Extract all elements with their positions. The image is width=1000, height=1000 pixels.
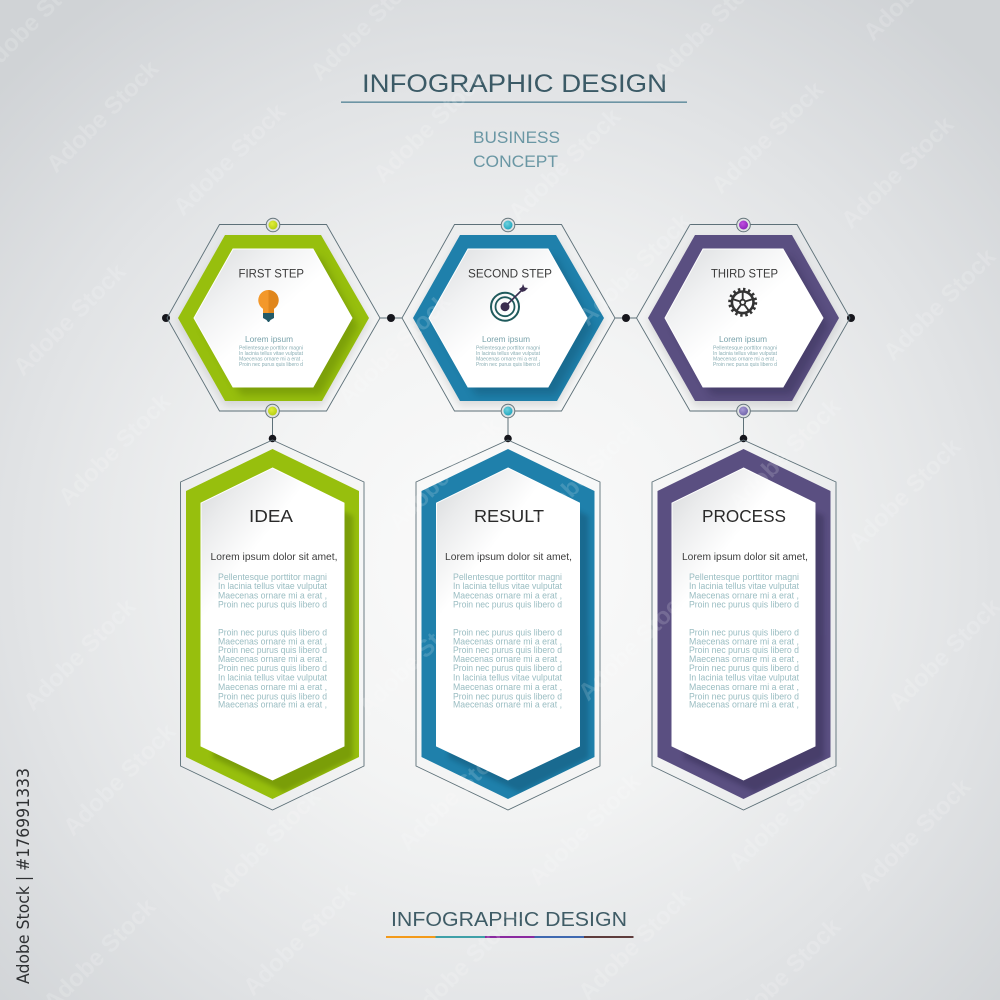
card text block 1: Pellentesque porttitor magni (453, 571, 562, 582)
card text block 2: Maecenas ornare mi a erat , (689, 699, 799, 710)
white hexagon panel (194, 249, 352, 387)
column 3: third step hexagon (636, 218, 850, 442)
card heading: RESULT (474, 506, 544, 526)
infographic canvas: Adobe Stock (723, 753, 847, 876)
subtitle: BUSINESS (473, 129, 560, 147)
card text block 2: Maecenas ornare mi a erat , (218, 699, 327, 710)
card text block 2: Proin nec purus quis libero d (453, 662, 562, 673)
infographic canvas: Adobe Stock (836, 111, 960, 234)
card text block 1: In lacinia tellus vitae vulputat (453, 580, 562, 591)
step heading: FIRST STEP (238, 266, 304, 280)
infographic canvas: Adobe Stock (853, 773, 977, 896)
card text block 2: Proin nec purus quis libero d (689, 690, 799, 701)
green card band (186, 449, 359, 799)
step caption (476, 334, 540, 368)
top node (266, 218, 280, 232)
footer colour bar (386, 936, 634, 938)
step heading: SECOND STEP (468, 266, 552, 280)
infographic canvas: Adobe Stock (18, 593, 142, 716)
step caption (713, 334, 777, 368)
infographic canvas: Adobe Stock (238, 878, 362, 1000)
infographic canvas: Adobe Stock (573, 583, 697, 706)
hexagon outline (636, 224, 850, 411)
card heading: IDEA (249, 506, 293, 526)
bottom node and connector (501, 404, 515, 442)
column 1: first step hexagon (167, 218, 380, 442)
card text block 1: Maecenas ornare mi a erat , (689, 589, 799, 600)
hexagon outline (167, 224, 380, 411)
subtitle: CONCEPT (473, 153, 558, 171)
bottom node and connector (266, 404, 279, 442)
step caption: Maecenas ornare mi a erat , (713, 357, 777, 363)
card text block 2: Proin nec purus quis libero d (453, 690, 562, 701)
card text block 1: In lacinia tellus vitae vulputat (218, 580, 327, 591)
card text block 2: In lacinia tellus vitae vulputat (453, 671, 562, 682)
step heading: THIRD STEP (711, 266, 778, 280)
card text block 2: Maecenas ornare mi a erat , (218, 635, 327, 646)
column 2: second step hexagon (402, 218, 615, 442)
card text block 2: Maecenas ornare mi a erat , (453, 681, 562, 692)
bottom node and connector (737, 404, 750, 442)
card text block 2: Proin nec purus quis libero d (218, 627, 327, 638)
card text block 1 (218, 571, 327, 610)
step caption: In lacinia tellus vitae vulputat (713, 351, 777, 357)
card text block 1: Pellentesque porttitor magni (218, 571, 327, 582)
card text block 2: Maecenas ornare mi a erat , (689, 653, 799, 664)
step caption: Pellentesque porttitor magni (239, 346, 303, 352)
card text block 2: Maecenas ornare mi a erat , (218, 681, 327, 692)
step caption: In lacinia tellus vitae vulputat (239, 351, 303, 357)
white hexagon panel (665, 249, 823, 387)
card text block 2: Maecenas ornare mi a erat , (689, 681, 799, 692)
card text block 1: Proin nec purus quis libero d (453, 599, 562, 610)
card text block 2: Maecenas ornare mi a erat , (218, 653, 327, 664)
step caption: Maecenas ornare mi a erat , (476, 357, 540, 363)
card text block 1: Proin nec purus quis libero d (218, 599, 327, 610)
card text block 1: Pellentesque porttitor magni (689, 571, 799, 582)
card text block 1 (453, 571, 562, 610)
infographic canvas: Adobe Stock (333, 288, 457, 411)
step caption: Lorem ipsum (245, 334, 293, 344)
card outline (652, 440, 836, 810)
step caption: Lorem ipsum (719, 334, 767, 344)
card text block 2: Proin nec purus quis libero d (218, 690, 327, 701)
infographic canvas: Adobe Stock (878, 243, 1000, 366)
card heading: PROCESS (702, 506, 786, 526)
infographic canvas: Adobe Stock (168, 98, 292, 221)
card text block 1: Proin nec purus quis libero d (689, 599, 799, 610)
infographic canvas: Adobe Stock (523, 413, 647, 536)
infographic canvas: Adobe Stock (393, 733, 517, 856)
infographic canvas: Adobe Stock (843, 433, 967, 556)
card text block 2 (218, 627, 327, 710)
card text block 1: Maecenas ornare mi a erat , (453, 589, 562, 600)
card text block 2: Maecenas ornare mi a erat , (453, 635, 562, 646)
white card panel (436, 468, 580, 780)
hexagon outline (402, 224, 615, 411)
step caption: Lorem ipsum (482, 334, 530, 344)
column 3: process card (652, 440, 836, 810)
card text block 2: Proin nec purus quis libero d (689, 644, 799, 655)
infographic canvas: Adobe Stock (353, 598, 477, 721)
column 1: idea card (180, 440, 364, 810)
step caption: Pellentesque porttitor magni (476, 346, 540, 352)
infographic canvas: Adobe Stock (706, 76, 830, 199)
white hexagon panel (429, 249, 587, 387)
white card panel (201, 468, 344, 780)
infographic canvas: Adobe Stock (203, 783, 327, 906)
card text block 1 (689, 571, 799, 610)
card text block 1: In lacinia tellus vitae vulputat (689, 580, 799, 591)
step caption: Proin nec purus quis libero d (476, 362, 540, 368)
purple card band (658, 449, 830, 799)
blue card band (422, 449, 594, 799)
icon: target with arrow (491, 284, 528, 321)
green hexagon band (178, 235, 369, 401)
card text block 2: Maecenas ornare mi a erat , (453, 653, 562, 664)
card text block 2: Proin nec purus quis libero d (453, 627, 562, 638)
step caption: Pellentesque porttitor magni (713, 346, 777, 352)
white card panel (672, 468, 815, 780)
infographic canvas: Adobe Stock (523, 768, 647, 891)
step caption: Proin nec purus quis libero d (713, 362, 777, 368)
footer title: INFOGRAPHIC DESIGN (391, 908, 627, 931)
infographic canvas: Adobe Stock (53, 388, 177, 511)
step caption: In lacinia tellus vitae vulputat (476, 351, 540, 357)
card intro line: Lorem ipsum dolor sit amet, (682, 552, 808, 563)
infographic canvas: Adobe Stock (723, 393, 847, 516)
card text block 2: Proin nec purus quis libero d (218, 662, 327, 673)
card outline (416, 440, 600, 810)
step caption: Proin nec purus quis libero d (239, 362, 303, 368)
card outline (180, 440, 364, 810)
card text block 2: Maecenas ornare mi a erat , (453, 699, 562, 710)
card text block 2: Proin nec purus quis libero d (453, 644, 562, 655)
card text block 2: Proin nec purus quis libero d (689, 627, 799, 638)
icon: light bulb (258, 290, 279, 322)
title: INFOGRAPHIC DESIGN (362, 70, 667, 98)
step caption: Maecenas ornare mi a erat , (239, 357, 303, 363)
infographic canvas: Adobe Stock (503, 103, 627, 226)
card text block 2: In lacinia tellus vitae vulputat (689, 671, 799, 682)
icon: gear (730, 289, 756, 315)
purple hexagon band (648, 235, 839, 401)
card text block 2: Proin nec purus quis libero d (689, 662, 799, 673)
subtitle (473, 129, 560, 171)
infographic canvas: Adobe Stock (573, 208, 697, 331)
step caption (239, 334, 303, 368)
top node (501, 218, 515, 232)
blue hexagon band (413, 235, 604, 401)
card text block 2 (689, 627, 799, 710)
card intro line: Lorem ipsum dolor sit amet, (445, 552, 572, 563)
infographic canvas: Adobe Stock (8, 258, 132, 381)
card text block 2: Proin nec purus quis libero d (218, 644, 327, 655)
column 2: result card (416, 440, 600, 810)
infographic canvas: Adobe Stock (368, 65, 492, 188)
infographic canvas: Adobe Stock (41, 55, 165, 178)
card text block 2: Maecenas ornare mi a erat , (689, 635, 799, 646)
connector dots between hexagons (162, 314, 855, 322)
infographic canvas: Adobe Stock (383, 413, 507, 536)
card text block 2 (453, 627, 562, 710)
top node (737, 218, 750, 232)
card text block 1: Maecenas ornare mi a erat , (218, 589, 327, 600)
card text block 2: In lacinia tellus vitae vulputat (218, 671, 327, 682)
card intro line: Lorem ipsum dolor sit amet, (210, 552, 338, 563)
infographic canvas: Adobe Stock (58, 718, 182, 841)
stock id label: Adobe Stock | #176991333 (14, 768, 34, 984)
